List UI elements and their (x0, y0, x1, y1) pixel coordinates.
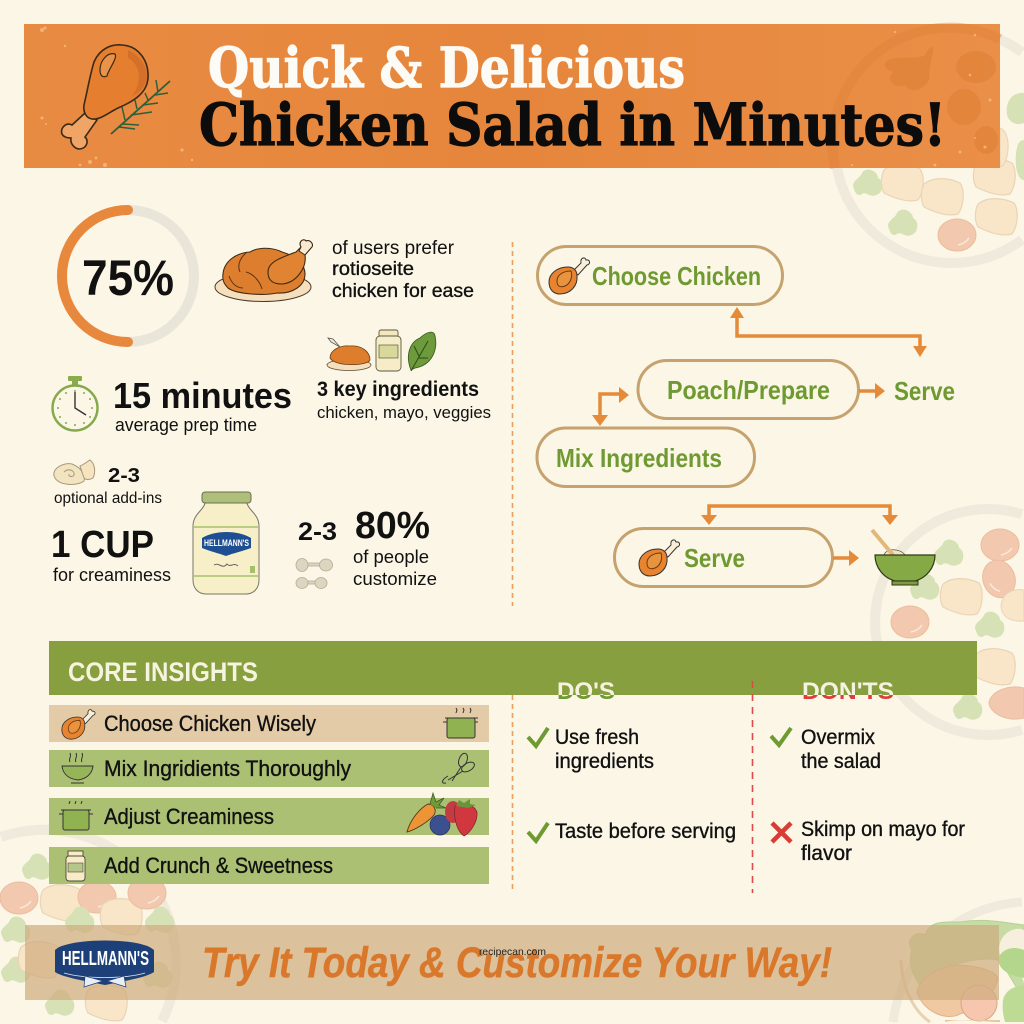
stat text: users prefer rotisserie: of users prefer (332, 238, 455, 259)
icon: three ingredients (327, 330, 436, 371)
arrow: prepare to serve (859, 383, 885, 399)
icon: check (528, 728, 548, 746)
icon: carrot and berries (407, 793, 477, 836)
stat text: users prefer rotisserie: rotioseite (332, 259, 414, 280)
stat: 75% donut (62, 210, 194, 342)
logo: Hellmann's (55, 940, 154, 987)
decorative salad bowl: bottom right (893, 902, 1024, 1022)
heading: don'ts: DON'TS (802, 678, 894, 705)
insight row: mix ingredients: Mix Ingridients Thoroughly (104, 756, 351, 781)
insight row: add crunch and sweetness (49, 847, 489, 884)
flow step: mix ingredients: Mix Ingredients (556, 443, 722, 473)
icon: customize dumbbells (296, 558, 332, 588)
stat text: 1 cup: for creaminess (53, 565, 171, 585)
logo: Hellmann's: HELLMANN'S (62, 948, 149, 970)
insight row: mix ingredients (49, 750, 489, 787)
section header band: core insights: CORE INSIGHTS (68, 657, 258, 687)
flow step: poach or prepare: Poach/Prepare (667, 375, 830, 405)
flow step: serve (614, 528, 832, 586)
stat text: optional add-ins: optional add-ins (54, 490, 162, 507)
stat text: 80% customize: customize (353, 568, 437, 589)
icon: drumstick (549, 258, 590, 294)
stat text: 15 minutes: average prep time (115, 415, 257, 435)
arrow: chicken to serve (730, 307, 927, 357)
decorative plate: top right (835, 29, 1024, 263)
stat text: 3 key ingredients: 3 key ingredients (317, 378, 479, 401)
flow step: poach or prepare (638, 360, 858, 418)
stat text: optional add-ins: 2-3 (108, 465, 140, 487)
stat text: users prefer rotisserie (332, 238, 474, 302)
don't: skimp on mayo (772, 818, 965, 865)
stat text: users prefer rotisserie: chicken for ease (332, 281, 474, 302)
do: taste before serving: Taste before serving (555, 820, 736, 843)
don't: skimp on mayo: Skimp on mayo for (801, 818, 965, 841)
do: use fresh ingredients: Use fresh (555, 726, 639, 749)
insight row: choose chicken wisely: Choose Chicken Wisely (104, 711, 316, 736)
stat text: 15 minutes (113, 375, 292, 435)
arrow: mix to prepare (592, 387, 629, 426)
icon: jar (66, 851, 85, 881)
icon: mayonnaise jar (193, 492, 259, 594)
icon: check (528, 823, 548, 841)
flow step: serve: Serve (684, 543, 745, 573)
icon: mayonnaise jar: HELLMANN'S (204, 538, 249, 549)
icon: steaming bowl (62, 753, 93, 783)
stat text: 80% customize (353, 505, 437, 589)
title banner (24, 24, 1000, 168)
stat text: optional add-ins (54, 465, 162, 507)
section header band: core insights (49, 641, 977, 695)
heading: don'ts (804, 682, 894, 699)
flow step: mix ingredients (537, 428, 754, 486)
don't: overmix the salad (771, 726, 881, 773)
heading: do's: DO'S (557, 678, 615, 705)
stat text: 80% customize: 80% (355, 505, 430, 547)
icon: salad servers (442, 752, 476, 783)
icon: drumstick (62, 710, 95, 739)
arrow: bracket over serve (701, 506, 898, 525)
stat text: 1 cup (51, 524, 171, 585)
icon: drumstick with rosemary (62, 45, 170, 149)
call to action text: Try It Today & Customize Your Way! (202, 939, 832, 987)
decorative plate: bottom left (0, 830, 176, 1021)
stat text: 3 key ingredients (317, 378, 491, 422)
faint plate visible through banner (833, 28, 1000, 168)
do: use fresh ingredients (528, 726, 654, 773)
stat text: 15 minutes: 15 minutes (113, 375, 292, 416)
icon: check (771, 728, 791, 745)
insight row: adjust creaminess: Adjust Creaminess (104, 804, 274, 829)
insight row: adjust creaminess (49, 793, 489, 836)
icon: pot (443, 708, 478, 738)
stat text: 1 cup: 1 CUP (51, 524, 154, 566)
icon: drumstick (639, 540, 680, 576)
icon: salad bowl with spoon (872, 530, 935, 585)
flow step: choose chicken (538, 246, 782, 304)
icon: pot (59, 801, 93, 830)
watermark: recipecan.com (479, 946, 546, 958)
title line 1: Quick & Delicious (208, 35, 685, 100)
don't: skimp on mayo: flavor (801, 842, 852, 865)
don't: overmix the salad: the salad (801, 750, 881, 773)
heading: do's (558, 682, 614, 699)
stat text: 80% customize: of people (353, 546, 429, 567)
stat text: 2-3 label: 2-3 (298, 518, 337, 546)
icon: roast chicken on plate (215, 240, 312, 302)
flow label: serve: Serve (894, 376, 955, 406)
arrow: serve to bowl (833, 550, 859, 566)
stat: 75% donut: 75% (82, 250, 174, 306)
banner speckles (40, 26, 992, 167)
decorative plate: right middle (875, 509, 1024, 735)
icon: add-ins (54, 460, 95, 484)
stat text: 3 key ingredients: chicken, mayo, veggies (317, 403, 491, 422)
heading: don'ts: DON'TS (802, 678, 894, 705)
insight row: choose chicken wisely (49, 705, 489, 742)
heading: do's: DO'S (557, 678, 615, 705)
footer call-to-action band (25, 925, 999, 1000)
icon: stopwatch (52, 376, 98, 430)
insight row: add crunch and sweetness: Add Crunch & Sweetness (104, 853, 333, 878)
don't: overmix the salad: Overmix (801, 726, 875, 749)
icon: cross (772, 823, 791, 842)
flow step: choose chicken: Choose Chicken (592, 261, 761, 291)
do: use fresh ingredients: ingredients (555, 750, 654, 773)
